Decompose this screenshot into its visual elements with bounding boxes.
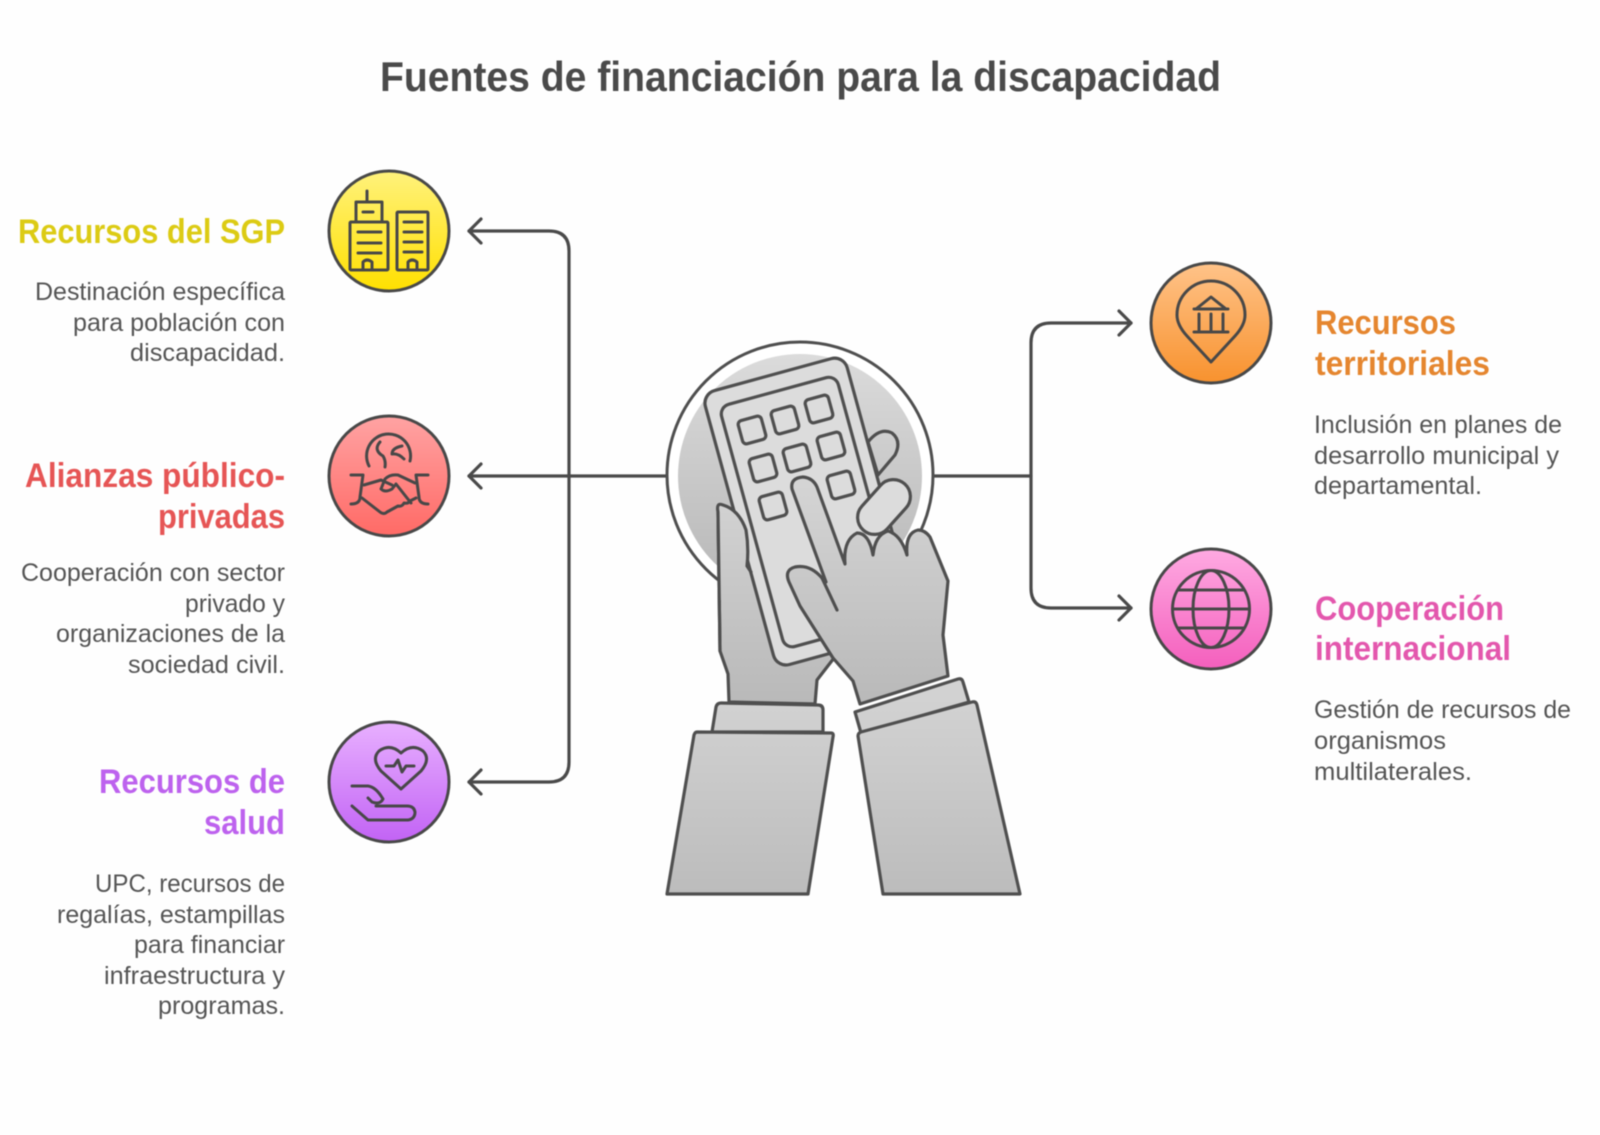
icon: heart in hand (purple circle)	[329, 722, 449, 842]
text: SGP description	[35, 278, 285, 367]
heading: Recursos de salud: Recursos de	[99, 763, 285, 801]
heading: Cooperación internacional	[1315, 590, 1511, 668]
heading: Recursos territoriales	[1315, 304, 1490, 383]
text: salud description: para financiar	[134, 931, 285, 959]
title: Fuentes de financiación para la discapacidad	[380, 53, 1221, 100]
text: salud description	[57, 870, 285, 1020]
text: alianzas description	[21, 559, 285, 679]
heading: Recursos territoriales: Recursos	[1315, 304, 1456, 342]
text: territoriales description: Inclusión en planes de	[1314, 411, 1562, 439]
text: cooperación description: multilaterales.	[1314, 758, 1472, 786]
heading: Alianzas público-privadas	[25, 457, 285, 536]
right sleeve	[858, 702, 1020, 894]
icon: buildings (yellow circle)	[329, 171, 449, 291]
connector arrows: left branch	[469, 219, 666, 794]
text: salud description: programas.	[158, 992, 285, 1020]
left sleeve	[667, 732, 833, 894]
text: alianzas description: sociedad civil.	[128, 651, 285, 679]
heading: Cooperación internacional: internacional	[1315, 630, 1511, 668]
left cuff	[712, 703, 823, 732]
text: territoriales description: desarrollo municipal y	[1314, 442, 1559, 470]
heading: Recursos de salud: salud	[204, 804, 285, 842]
icon: handshake and globe (red circle)	[329, 416, 449, 536]
heading: Recursos de salud	[99, 763, 285, 842]
text: alianzas description: organizaciones de la	[56, 620, 285, 648]
text: alianzas description: Cooperación con sector	[21, 559, 285, 587]
text: territoriales description	[1314, 411, 1562, 500]
heading: Recursos del SGP: Recursos del SGP	[18, 213, 285, 251]
text: cooperación description: Gestión de recursos de	[1314, 696, 1571, 724]
text: cooperación description	[1314, 696, 1571, 786]
calculator keys	[737, 394, 856, 521]
heading: Cooperación internacional: Cooperación	[1315, 590, 1504, 628]
text: SGP description: para población con	[73, 309, 285, 337]
heading: Alianzas público-privadas: privadas	[158, 498, 285, 536]
text: salud description: infraestructura y	[104, 962, 285, 990]
text: SGP description: discapacidad.	[130, 339, 285, 367]
calculator	[702, 355, 919, 668]
icon: location pin with institution (orange circle)	[1151, 263, 1271, 383]
icon: globe (pink circle)	[1151, 549, 1271, 669]
left thumb	[718, 504, 751, 651]
side finger	[851, 473, 917, 541]
heading: Alianzas público-privadas: Alianzas público-	[25, 457, 285, 495]
text: SGP description: Destinación específica	[35, 278, 285, 306]
connector arrows: right branch	[932, 311, 1131, 620]
central illustration: hands holding calculator	[667, 342, 1020, 894]
text: territoriales description: departamental.	[1314, 472, 1482, 500]
right hand pointing	[787, 477, 948, 704]
text: cooperación description: organismos	[1314, 727, 1446, 755]
right cuff	[855, 679, 969, 733]
text: salud description: regalías, estampillas	[57, 901, 285, 929]
heading: Recursos territoriales: territoriales	[1315, 345, 1490, 383]
text: alianzas description: privado y	[185, 590, 285, 618]
text: salud description: UPC, recursos de	[95, 870, 285, 898]
